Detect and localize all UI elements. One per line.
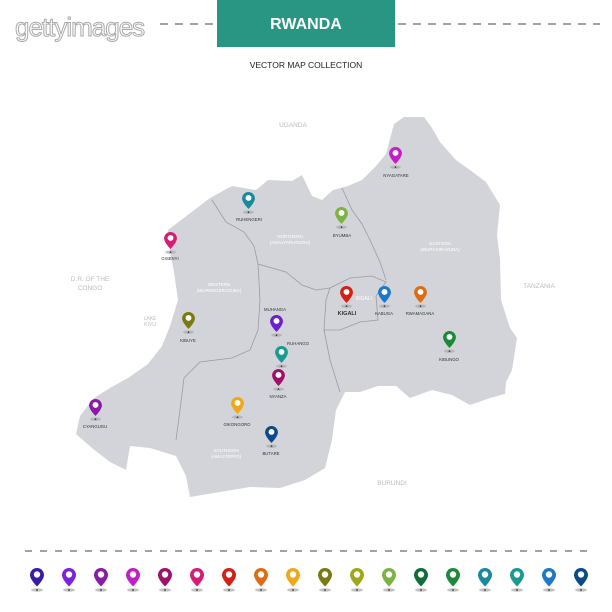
neighbour labels [71,122,555,487]
region labels: (IBURENGERAZUBA) [197,288,242,293]
neighbour labels: CONGO [78,285,102,292]
neighbour labels: BURUNDI [377,480,407,487]
subtitle: VECTOR MAP COLLECTION [250,60,362,70]
neighbour labels: KIVU [144,322,156,328]
region labels: SOUTHERN [213,448,239,453]
neighbour labels: D.R. OF THE [71,276,110,283]
pins on map: NYANZA [269,394,287,399]
region labels: WESTERN [208,282,230,287]
pins on map [83,147,460,456]
region labels: NORTHERN [277,234,303,239]
title box [217,0,395,47]
pins on map: KIBUNGO [439,357,460,362]
region labels [197,234,460,459]
title box: RWANDA [270,16,342,33]
pins on map: KIGALI [338,311,357,317]
bottom dashed line [25,550,590,552]
pins on map: CYANGUGU [83,424,107,429]
pins on map: MUHANGA [264,307,286,312]
pins on map: KIBUYE [180,338,196,343]
neighbour labels: TANZANIA [523,283,555,290]
pins on map: GISENYI [161,256,179,261]
region labels: EASTERN [429,241,451,246]
pins on map: RUHENGERI [236,217,262,222]
pins on map: GIKONGORO [224,422,251,427]
region labels: (AMAJYEPFO) [211,454,242,459]
pins on map: RUHANGO [287,341,310,346]
top dashed line [160,23,600,25]
region labels: (AMAJYARUGURU) [270,240,311,245]
watermark: gettyimages [15,12,145,42]
pin legend row [30,568,588,592]
pins on map: KABUGA [375,311,393,316]
pins on map: NYAGATARE [383,173,409,178]
pins on map: BYUMBA [333,233,351,238]
region labels: KIGALI [356,296,372,302]
neighbour labels: LAKE [144,316,157,322]
pins on map: RWAMAGANA [406,311,434,316]
region labels: (IBURASIRAZUBA) [420,247,460,252]
map: Rwanda [76,117,517,497]
neighbour labels: UGANDA [279,122,308,129]
pins on map: BUTARE [262,451,280,456]
